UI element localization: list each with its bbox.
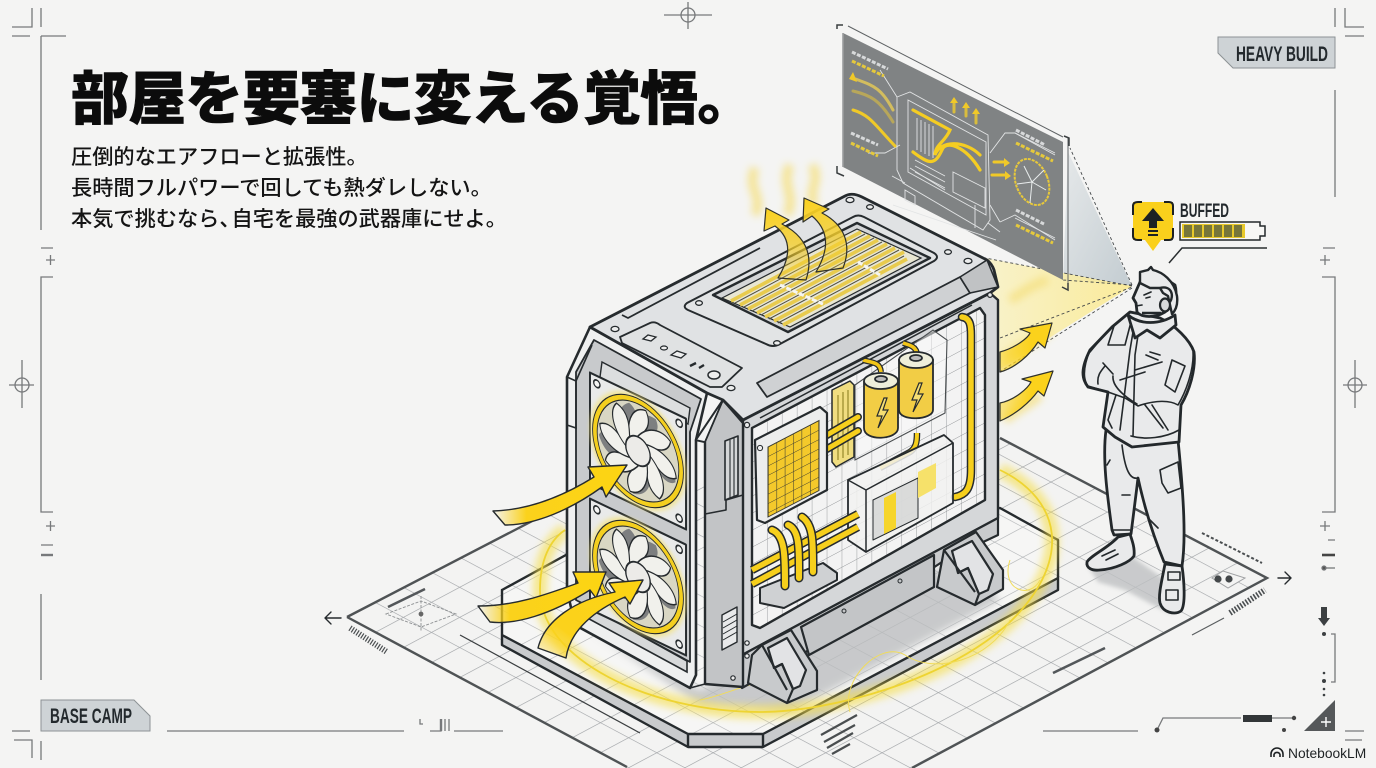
window: internal box behind capacitors xyxy=(855,330,947,460)
arrow: sheet right xyxy=(1278,572,1291,584)
arrow: exhaust side lower xyxy=(1000,371,1053,421)
window: power supply box xyxy=(848,435,953,552)
arrow: exhaust top right xyxy=(803,198,847,272)
window: pipe manifold xyxy=(760,563,837,608)
window: vertical pipes xyxy=(772,517,813,586)
icon: down arrow marker xyxy=(1318,607,1330,696)
vent plate xyxy=(685,216,937,346)
vent grille xyxy=(713,223,930,332)
right boot xyxy=(1159,564,1184,613)
registration mark: left xyxy=(9,360,34,408)
port panel xyxy=(620,322,742,387)
cargo pocket xyxy=(1160,462,1181,493)
hair xyxy=(1140,267,1177,314)
case top panel xyxy=(590,194,998,428)
battery gauge xyxy=(1180,222,1265,240)
arrow: intake middle xyxy=(478,572,606,623)
status icon: buff arrow xyxy=(1133,202,1173,251)
left boot xyxy=(1087,534,1134,570)
jacket hem xyxy=(1131,430,1179,438)
tag: base camp xyxy=(41,700,150,731)
head xyxy=(1133,275,1176,316)
body text: 圧倒的なエアフローと拡張性。 xyxy=(71,145,368,169)
body text: 本気で挑むなら、自宅を最強の武器庫にせよ。 xyxy=(71,207,507,231)
logo: NotebookLM: NotebookLM xyxy=(1288,746,1366,761)
holographic fan xyxy=(1008,154,1056,210)
title: 部屋を要塞に変える覚悟。 xyxy=(71,67,754,132)
projection beam: yellow cone xyxy=(985,258,1132,375)
character: operator xyxy=(1083,267,1194,613)
arrow: exhaust top left xyxy=(764,208,809,280)
window: RAM module xyxy=(832,381,854,467)
tag: heavy build: HEAVY BUILD xyxy=(1236,43,1328,66)
tag: base camp: BASE CAMP xyxy=(50,705,132,728)
holographic case wireframe xyxy=(868,70,1055,240)
arrow: sheet left xyxy=(325,612,341,624)
tag: heavy build xyxy=(1218,37,1335,68)
yellow energy ring xyxy=(540,470,1052,712)
arrow: exhaust side upper xyxy=(1000,323,1052,372)
left foot xyxy=(748,630,817,703)
bottom rule marks xyxy=(167,719,1138,731)
body text: 長時間フルパワーで回しても熱ダレしない。 xyxy=(71,176,492,200)
floor blueprint sheet xyxy=(347,438,1267,768)
arms xyxy=(1084,350,1193,406)
case right side panel xyxy=(742,293,998,655)
jacket xyxy=(1083,312,1194,447)
fan: upper xyxy=(590,373,686,530)
window: right yellow tube xyxy=(955,317,971,497)
window: capacitors xyxy=(863,343,933,438)
window: connector pipe xyxy=(880,433,917,468)
frame marks: left side xyxy=(12,8,66,760)
collar xyxy=(1128,315,1176,338)
registration mark: right xyxy=(1343,360,1367,408)
holographic airflow arrows xyxy=(853,78,1006,175)
heat wisps xyxy=(752,165,1050,420)
legs xyxy=(1105,430,1184,566)
person shadow xyxy=(1088,555,1180,614)
case front panel xyxy=(567,327,707,688)
scale marks: bottom right xyxy=(1154,715,1296,732)
base rail xyxy=(742,518,998,688)
window: horizontal pipes xyxy=(752,514,858,584)
label: buffed: BUFFED xyxy=(1180,201,1229,222)
holographic callout marks xyxy=(851,52,1053,243)
bottom beam xyxy=(801,555,934,655)
body text xyxy=(71,145,507,231)
raised platform xyxy=(502,508,1058,747)
PC case xyxy=(567,194,1003,703)
holographic blueprint panel xyxy=(837,25,1069,290)
frame marks: right side xyxy=(1320,8,1364,740)
fan: lower xyxy=(590,499,686,656)
window: grid radiator xyxy=(755,407,827,523)
right foot xyxy=(937,532,1003,605)
window: double tubes xyxy=(827,417,858,449)
case shadow xyxy=(590,560,1000,712)
arrow: intake lower xyxy=(538,580,643,658)
corner pillar xyxy=(690,400,749,688)
projection beam: grey cone xyxy=(1063,152,1132,286)
registration mark: top xyxy=(664,2,712,29)
beam dashed lines xyxy=(985,148,1132,378)
callout leader xyxy=(1169,248,1267,263)
arrow: intake upper xyxy=(493,465,627,525)
headset xyxy=(1142,287,1172,313)
corner triangle with plus xyxy=(1304,700,1335,731)
panel screws xyxy=(611,197,992,428)
